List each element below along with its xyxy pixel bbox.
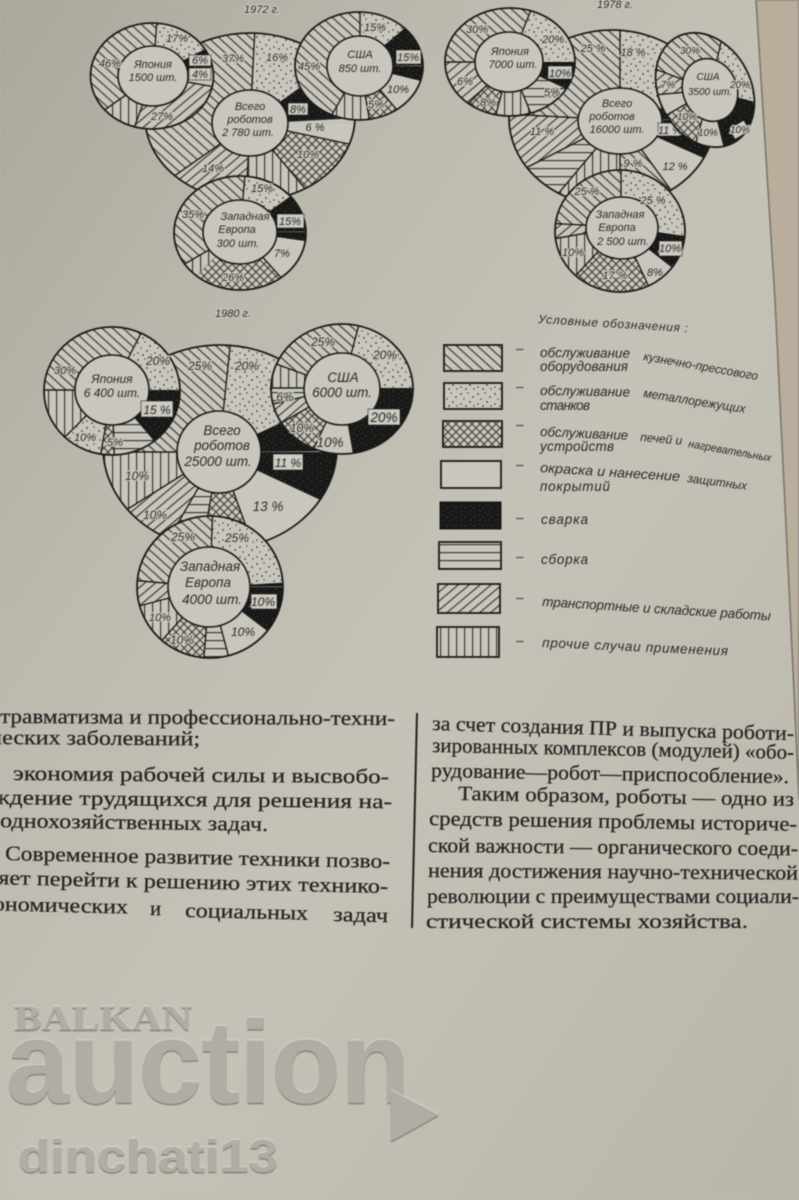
donut: total robots 1978: роботов: [588, 111, 635, 123]
donut: USA 1980: 10%: [316, 435, 344, 450]
donut: Japan 1978: 5%: [544, 87, 560, 99]
donut: Western Europe 1972: 26%: [221, 272, 244, 284]
donut: total robots 1972: Всего: [235, 101, 265, 113]
donut: total robots 1978: 11 %: [530, 126, 554, 138]
legend item: furnaces: [443, 417, 773, 465]
donut: Western Europe 1978: 25 %: [639, 195, 666, 207]
donut: total robots 1978: [507, 28, 710, 198]
heading: 1972: 1972 г.: [244, 4, 280, 16]
legend item: machine tools: металлорежущих: [643, 386, 747, 416]
donut: Western Europe 1972: 35%: [182, 209, 204, 221]
donut: total robots 1978: 9 %: [624, 158, 643, 170]
donut: Japan 1980: Япония: [90, 372, 133, 386]
donut: Western Europe 1972: 15%: [251, 183, 273, 195]
donut: total robots 1972: 10%: [297, 149, 319, 161]
text column: left: Современное развитие техники позво-: [5, 843, 390, 873]
text column: left: ждение трудящихся для решения на-: [0, 787, 392, 813]
text column: left: задач: [333, 904, 388, 927]
donut: total robots 1980: роботов: [193, 438, 250, 453]
donut: Western Europe 1980: 10%: [251, 595, 275, 609]
donut: total robots 1972: роботов: [226, 114, 273, 126]
legend item: painting and coatings: покрытий: [540, 479, 610, 494]
donut: total robots 1972: 6 %: [306, 122, 325, 134]
donut: Japan 1972: 46%: [99, 58, 121, 70]
donut: total robots 1980: 25%: [187, 359, 212, 373]
donut: USA 1980: [269, 322, 415, 456]
donut: Japan 1972: Япония: [133, 59, 172, 71]
donut: Japan 1972: 1500 шт.: [129, 72, 177, 84]
legend item: forging equipment: оборудования: [540, 359, 628, 374]
donut: Japan 1978: 30%: [466, 24, 488, 36]
text column: left: и: [150, 898, 161, 920]
donut: total robots 1978: Всего: [602, 98, 632, 110]
donut: Western Europe 1972: [172, 174, 308, 292]
watermark: [6, 997, 437, 1182]
donut: total robots 1978: 16000 шт.: [590, 124, 644, 136]
text column: left: экономия рабочей силы и высвобо-: [13, 763, 389, 788]
text column: right: революции с преимуществами социали-: [427, 886, 799, 908]
text column: left: травматизма и профессионально-техни-: [0, 706, 395, 730]
legend item: other applications: –: [515, 633, 524, 648]
donut: total robots 1972: 14%: [202, 163, 224, 175]
donut: Japan 1972: [88, 21, 216, 131]
donut: USA 1980: 6%: [276, 390, 294, 404]
donut: Western Europe 1980: 10%: [170, 633, 194, 647]
donut: Japan 1972: 6%: [192, 55, 208, 67]
donut: total robots 1972: 2 780 шт.: [221, 127, 274, 139]
text column: right: за счет создания ПР и выпуска роботи-: [432, 713, 795, 745]
legend item: transport and warehouse: [438, 584, 771, 623]
legend item: furnaces: обслуживание: [540, 424, 628, 443]
donut: total robots 1980: 25000 шт.: [183, 454, 252, 469]
donut: Japan 1978: 20%: [541, 34, 564, 46]
donut: Japan 1978: 6%: [457, 76, 473, 88]
donut: total robots 1980: Всего: [203, 423, 241, 438]
donut: USA 1980: 20%: [372, 348, 397, 362]
watermark: username: dinchati13: [18, 1130, 278, 1182]
donut: Japan 1980: 5%: [107, 437, 123, 449]
donut: total robots 1980: 10%: [143, 508, 167, 522]
donut: USA 1972: 15%: [364, 22, 386, 34]
text column: right: Таким образом, роботы — одно из: [458, 783, 794, 811]
donut: USA 1980: 10%: [290, 421, 314, 435]
donut: Western Europe 1980: [135, 514, 285, 660]
donut: Japan 1978: 10%: [549, 68, 571, 80]
donut: total robots 1980: 10%: [125, 469, 149, 483]
icon: watermark triangle: [392, 1092, 437, 1140]
text column: left: [0, 706, 395, 927]
legend item: machine tools: станков: [540, 398, 590, 413]
donut: USA 1978: 20%: [729, 80, 750, 91]
legend item: other applications: прочие случаи применения: [542, 635, 728, 658]
donut: USA 1972: 5%: [368, 99, 384, 111]
legend item: forging equipment: –: [515, 341, 524, 356]
donut: total robots 1978: 25 %: [579, 43, 606, 55]
donut: total robots 1980: 11 %: [275, 456, 302, 470]
legend item: furnaces: печей и: [640, 430, 683, 448]
donut: USA 1980: 20%: [369, 410, 398, 425]
donut: Western Europe 1972: 300 шт.: [217, 238, 259, 250]
donut: Western Europe 1978: Западная: [595, 209, 645, 221]
donut: total robots 1980: 13 %: [253, 499, 283, 514]
donut: Western Europe 1972: Западная: [220, 211, 270, 223]
donut: Japan 1978: 7000 шт.: [489, 59, 537, 71]
text column: right: зированных комплексов (модулей) «обо-: [432, 735, 794, 764]
heading: 1980: 1980 г.: [215, 308, 251, 320]
legend item: furnaces: –: [515, 417, 524, 432]
donut: Japan 1978: 8%: [480, 97, 496, 109]
legend item: painting and coatings: [441, 457, 749, 494]
legend item: painting and coatings: –: [515, 457, 524, 472]
legend item: assembly: –: [515, 549, 524, 564]
donut: Western Europe 1980: Европа: [185, 575, 231, 590]
donut: total robots 1980: [102, 343, 338, 542]
legend item: painting and coatings: защитных: [686, 471, 749, 493]
chart: 1980: [42, 309, 415, 660]
donut: Western Europe 1972: 15%: [279, 216, 301, 228]
donut: Western Europe 1972: 7%: [274, 248, 290, 260]
donut: Western Europe 1980: Западная: [180, 559, 240, 574]
donut: Japan 1980: 30%: [54, 365, 76, 377]
donut: total robots 1972: 8%: [290, 104, 306, 116]
legend item: assembly: сборка: [541, 552, 588, 567]
donut: Western Europe 1980: 10%: [149, 612, 171, 624]
donut: Western Europe 1980: 4000 шт.: [182, 592, 242, 607]
donut: USA 1978: 30%: [680, 46, 700, 57]
text column: right: стической системы хозяйства.: [426, 911, 748, 933]
text column: right: рудование—робот—приспособление».: [431, 760, 789, 788]
legend item: welding: [440, 502, 588, 529]
donut: Japan 1972: 4%: [192, 69, 208, 81]
donut: total robots 1980: 20%: [234, 359, 259, 373]
donut: Western Europe 1978: 2 500 шт.: [596, 236, 649, 248]
donut: USA 1972: 850 шт.: [339, 63, 381, 75]
column divider: [412, 713, 417, 928]
donut: Japan 1980: 10%: [74, 432, 96, 444]
donut: total robots 1972: [144, 31, 356, 196]
donut: Western Europe 1978: 10%: [659, 243, 681, 255]
donut: Japan 1978: [443, 6, 577, 118]
donut: total robots 1978: 12 %: [662, 161, 688, 173]
legend item: machine tools: обслуживание: [540, 383, 630, 400]
donut: Western Europe 1972: Европа: [218, 224, 256, 236]
donut: Western Europe 1978: [553, 168, 687, 294]
donut: total robots 1972: 37%: [222, 53, 244, 65]
donut: USA 1972: США: [347, 49, 373, 61]
adjacent page edge: [756, 0, 799, 800]
donut: Japan 1980: [42, 325, 182, 457]
text column: right: ской важности — органического соеди-: [428, 835, 798, 860]
watermark: auction: auction: [6, 997, 410, 1129]
donut: USA 1978: США: [696, 72, 720, 83]
donut: USA 1978: 10%: [698, 128, 718, 139]
donut: total robots 1978: 18 %: [620, 47, 646, 59]
donut: Japan 1980: 6 400 шт.: [84, 386, 140, 400]
donut: USA 1972: [293, 10, 425, 122]
donut: USA 1972: 10%: [387, 84, 409, 96]
legend item: forging equipment: кузнечно-прессового: [642, 349, 759, 383]
legend heading: Условные обозначения :: [537, 312, 688, 335]
legend item: furnaces: устройств: [539, 439, 614, 454]
text column: right: средств решения проблемы историче-: [429, 808, 797, 836]
donut: Western Europe 1978: Европа: [598, 222, 636, 234]
donut: total robots 1978: 11 %: [658, 125, 682, 137]
donut: Western Europe 1978: 17 %: [602, 270, 628, 282]
legend item: welding: сварка: [541, 512, 588, 527]
donut: USA 1978: 10%: [730, 125, 750, 136]
chart: 1978: [443, 0, 756, 294]
legend item: assembly: [439, 542, 588, 569]
legend item: machine tools: –: [515, 379, 524, 394]
donut: total robots 1972: 16%: [266, 52, 288, 64]
donut: Japan 1972: 17%: [166, 33, 188, 45]
donut: USA 1972: 15%: [397, 52, 419, 64]
legend item: welding: –: [515, 510, 524, 525]
legend item: furnaces: нагревательных: [687, 438, 773, 465]
legend item: transport and warehouse: транспортные и складские работы: [542, 594, 771, 623]
donut: USA 1978: 3500 шт.: [688, 87, 732, 98]
donut: Japan 1972: 27%: [150, 111, 173, 123]
legend item: machine tools: [444, 379, 747, 416]
donut: Japan 1978: Япония: [490, 46, 529, 58]
text column: left: социальных: [185, 900, 308, 925]
donut: USA 1978: 10%: [677, 112, 697, 123]
legend: [437, 312, 773, 658]
text column: right: нения достижения научно-технической: [428, 860, 798, 885]
donut: Western Europe 1978: 8%: [647, 267, 663, 279]
donut: USA 1978: [654, 31, 756, 149]
donut: Western Europe 1980: 10%: [231, 625, 255, 639]
donut: USA 1980: США: [327, 370, 359, 385]
chart: 1972: [88, 4, 425, 292]
donut: Japan 1980: 20%: [145, 354, 170, 368]
legend item: other applications: [437, 627, 728, 658]
legend item: forging equipment: [444, 341, 759, 383]
donut: USA 1972: 45%: [298, 61, 320, 73]
watermark: BALKAN: BALKAN: [14, 998, 192, 1038]
donut: Western Europe 1978: 10%: [562, 247, 584, 259]
donut: Western Europe 1978: 25 %: [573, 186, 600, 198]
legend item: painting and coatings: окраска и нанесение: [540, 460, 680, 484]
text column: right: [426, 713, 799, 933]
donut: USA 1978: 7%: [661, 80, 675, 91]
donut: Western Europe 1980: 25%: [170, 530, 195, 544]
donut: USA 1980: 6000 шт.: [312, 385, 372, 400]
donut: Japan 1980: 15 %: [143, 403, 171, 417]
donut: USA 1980: 25%: [310, 335, 335, 349]
legend item: transport and warehouse: –: [515, 590, 524, 605]
donut: Western Europe 1980: 25%: [224, 531, 249, 545]
legend item: forging equipment: обслуживание: [540, 345, 630, 361]
